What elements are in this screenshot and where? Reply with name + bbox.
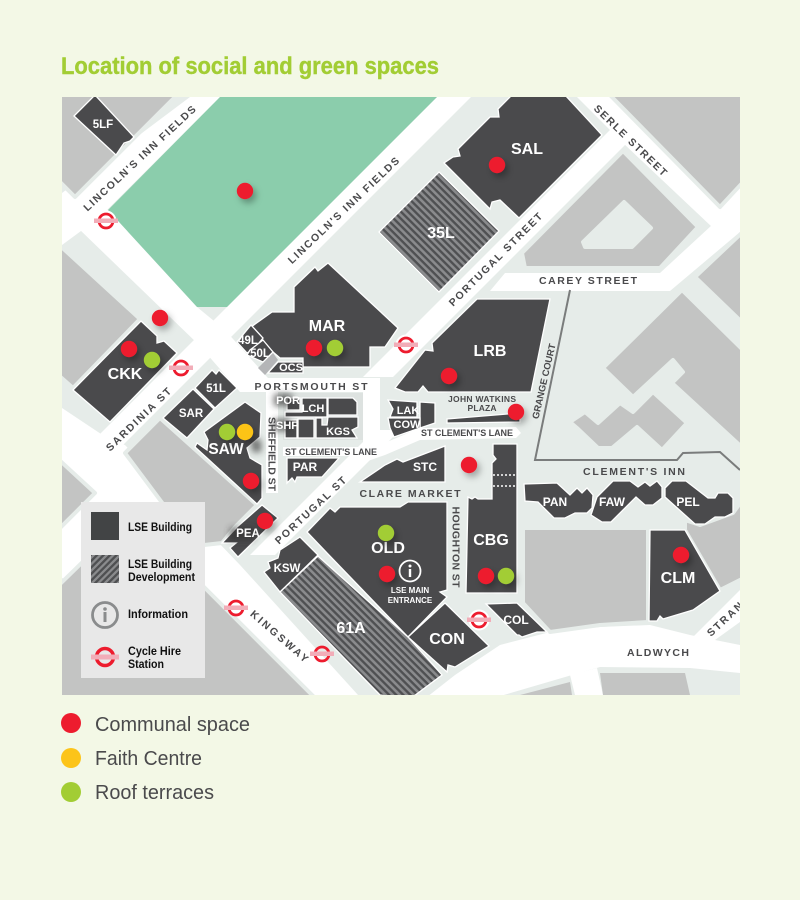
building labels: LCH: [302, 403, 324, 415]
building labels: PAR: [293, 460, 318, 474]
street labels: PORTUGAL ST: [273, 474, 349, 547]
building labels: COL: [503, 613, 529, 627]
street labels: KINGSWAY: [247, 608, 310, 665]
cycle hire stations: [94, 213, 491, 661]
key: Cycle Hire Station: Station: [128, 657, 164, 671]
building labels: STC: [413, 460, 437, 474]
light surround behind KGS group: [283, 393, 363, 440]
building labels: [93, 119, 700, 648]
legend item: faith centre: Faith Centre: [95, 748, 202, 770]
building labels: OLD: [371, 540, 405, 557]
street labels: HOUGHTON ST: [450, 506, 462, 588]
key: LSE Building Development: Development: [128, 570, 195, 584]
street labels: SHEFFIELD ST: [266, 417, 278, 492]
building labels: LAK: [397, 405, 419, 417]
building labels: LRB: [474, 343, 506, 360]
surrounding city blocks: [56, 91, 746, 705]
building labels: ENTRANCE: [388, 596, 433, 605]
building labels: 49L: [238, 335, 258, 347]
building labels: SAL: [511, 141, 543, 158]
key: Information: Information: [128, 607, 188, 621]
building labels: PEA: [236, 528, 260, 540]
street labels: SARDINIA ST: [104, 385, 174, 454]
street labels: STRAND: [705, 593, 753, 639]
key: LSE Building Development: LSE Building: [128, 557, 192, 571]
building labels: CON: [429, 631, 465, 648]
building labels: COW: [394, 419, 421, 431]
street labels: GRANGE COURT: [531, 343, 559, 420]
street labels: CLARE MARKET: [360, 488, 461, 500]
street labels: LINCOLN'S INN FIELDS: [81, 104, 199, 214]
Grange Court boundary: [535, 290, 740, 470]
icon: main entrance information: [400, 560, 420, 582]
building labels: 35L: [427, 225, 455, 242]
building labels: KSW: [274, 563, 301, 575]
building labels: PEL: [676, 495, 700, 509]
building labels: POR: [276, 395, 300, 407]
building labels: 51L: [206, 383, 226, 395]
street labels: PLAZA: [468, 403, 496, 413]
legend item: roof terraces: Roof terraces: [95, 782, 214, 804]
building labels: SAW: [208, 441, 244, 458]
key: LSE Building Development: [91, 555, 195, 584]
LSE buildings: [73, 95, 733, 699]
street labels: PORTSMOUTH ST: [254, 381, 368, 393]
street labels: PORTUGAL STREET: [447, 210, 545, 309]
building labels: SAR: [179, 408, 204, 420]
street labels: CLEMENT'S INN: [583, 466, 685, 478]
key: LSE Building: [91, 512, 192, 540]
building labels: CBG: [473, 532, 509, 549]
building labels: CLM: [661, 570, 695, 587]
infographic: [61, 56, 740, 802]
legend item: communal space: Communal space: [95, 714, 250, 736]
building labels: 5LF: [93, 119, 113, 131]
legend: space types: [61, 713, 250, 804]
street labels: LINCOLN'S INN FIELDS: [286, 155, 402, 267]
building labels: CKK: [108, 366, 143, 383]
roads: [62, 97, 740, 697]
building labels: MAR: [309, 318, 346, 335]
park: green space: [108, 97, 437, 307]
street labels: ALDWYCH: [627, 647, 689, 659]
building labels: 61A: [336, 620, 366, 637]
map key panel: [81, 502, 205, 678]
key: Information: [92, 602, 188, 628]
street labels: CAREY STREET: [539, 275, 638, 287]
building labels: KGS: [326, 426, 350, 438]
label shadows: [230, 394, 292, 540]
title: Location of social and green spaces: [61, 53, 439, 80]
key: LSE Building: LSE Building: [128, 520, 192, 534]
street labels: ST CLEMENT'S LANE: [285, 447, 377, 457]
street labels: [81, 103, 753, 665]
key: Cycle Hire Station: Cycle Hire: [128, 644, 181, 658]
building labels: OCS: [279, 362, 303, 374]
building labels: FAW: [599, 495, 626, 509]
building labels: PAN: [543, 495, 567, 509]
building labels: LSE MAIN: [391, 586, 429, 595]
street labels: ST CLEMENT'S LANE: [421, 428, 513, 438]
map: [56, 91, 753, 705]
building labels: SHF: [276, 420, 298, 432]
location dots: [121, 157, 689, 584]
building labels: 50L: [250, 348, 270, 360]
street labels: JOHN WATKINS: [448, 394, 516, 404]
street labels: SERLE STREET: [591, 103, 670, 179]
key: Cycle Hire Station: [91, 646, 181, 668]
